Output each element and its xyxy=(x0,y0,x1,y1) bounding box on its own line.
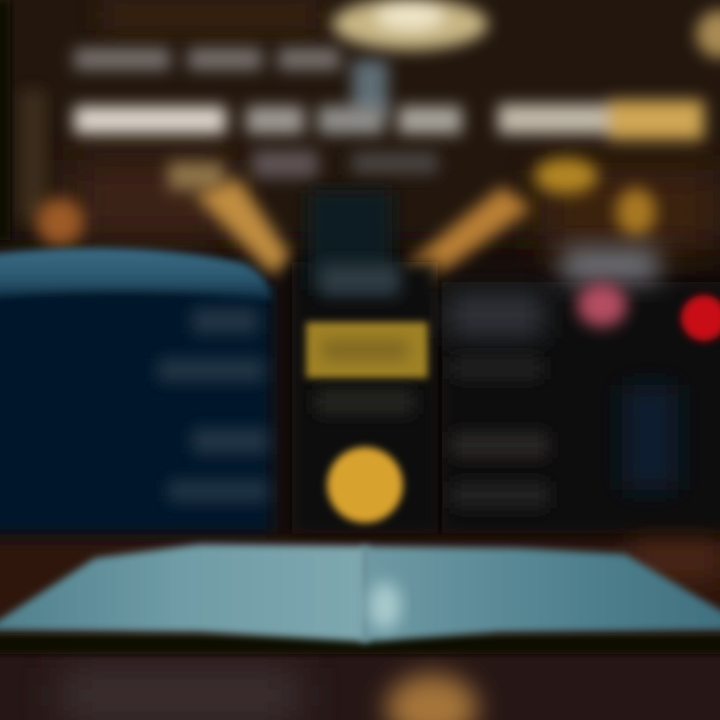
blurred headline: upper line xyxy=(74,48,388,116)
open book xyxy=(0,544,720,642)
grey band xyxy=(316,390,414,414)
arrow beam: left xyxy=(195,178,292,275)
book spine glare xyxy=(369,582,401,630)
blurred headline: subline xyxy=(168,150,598,194)
warm lights: right side xyxy=(616,188,656,236)
pink marker xyxy=(577,283,627,327)
yellow coin xyxy=(327,447,403,523)
book shadow xyxy=(0,634,720,654)
blurred column labels xyxy=(158,308,268,502)
yellow label xyxy=(306,322,428,378)
blurred headline: main line xyxy=(74,100,704,140)
table surface xyxy=(0,540,720,720)
ceiling lamp: center xyxy=(332,0,488,50)
panel: center dark bottle xyxy=(292,190,438,534)
arrow beam: right xyxy=(402,186,532,288)
panel: right column xyxy=(442,248,720,534)
red marker xyxy=(681,295,720,341)
panel: blue dome column xyxy=(0,248,272,535)
warm light: left figure xyxy=(36,198,84,246)
ceiling lamp: right xyxy=(696,10,720,58)
pale shapes xyxy=(562,248,658,282)
